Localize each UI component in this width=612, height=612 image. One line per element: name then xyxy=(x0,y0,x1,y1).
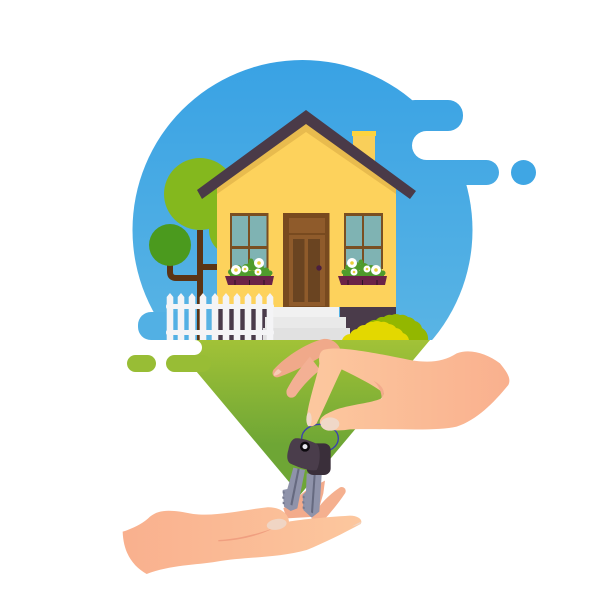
trees xyxy=(149,158,261,340)
foundation xyxy=(217,307,396,340)
bushes xyxy=(342,314,428,340)
map pin: sky with cloud bars xyxy=(120,60,536,400)
right flower box xyxy=(338,258,387,285)
roof xyxy=(197,110,416,199)
left key blade xyxy=(282,468,305,511)
picket fence xyxy=(166,293,274,340)
rear fob xyxy=(307,443,331,475)
door xyxy=(283,213,330,307)
front fob xyxy=(287,438,320,470)
lower hand xyxy=(123,481,361,574)
roof shadow xyxy=(217,122,396,194)
key ring xyxy=(302,424,338,452)
keys on blue ring xyxy=(282,424,338,518)
upper hand xyxy=(273,339,509,431)
map pin: green ground xyxy=(120,340,430,495)
left window xyxy=(230,213,268,269)
steps xyxy=(263,307,350,340)
right key blade xyxy=(302,473,322,518)
right window xyxy=(344,213,383,269)
walls xyxy=(217,127,396,307)
left flower box xyxy=(225,258,274,285)
chimney xyxy=(352,131,376,163)
key hole xyxy=(300,442,310,452)
house xyxy=(197,110,416,340)
